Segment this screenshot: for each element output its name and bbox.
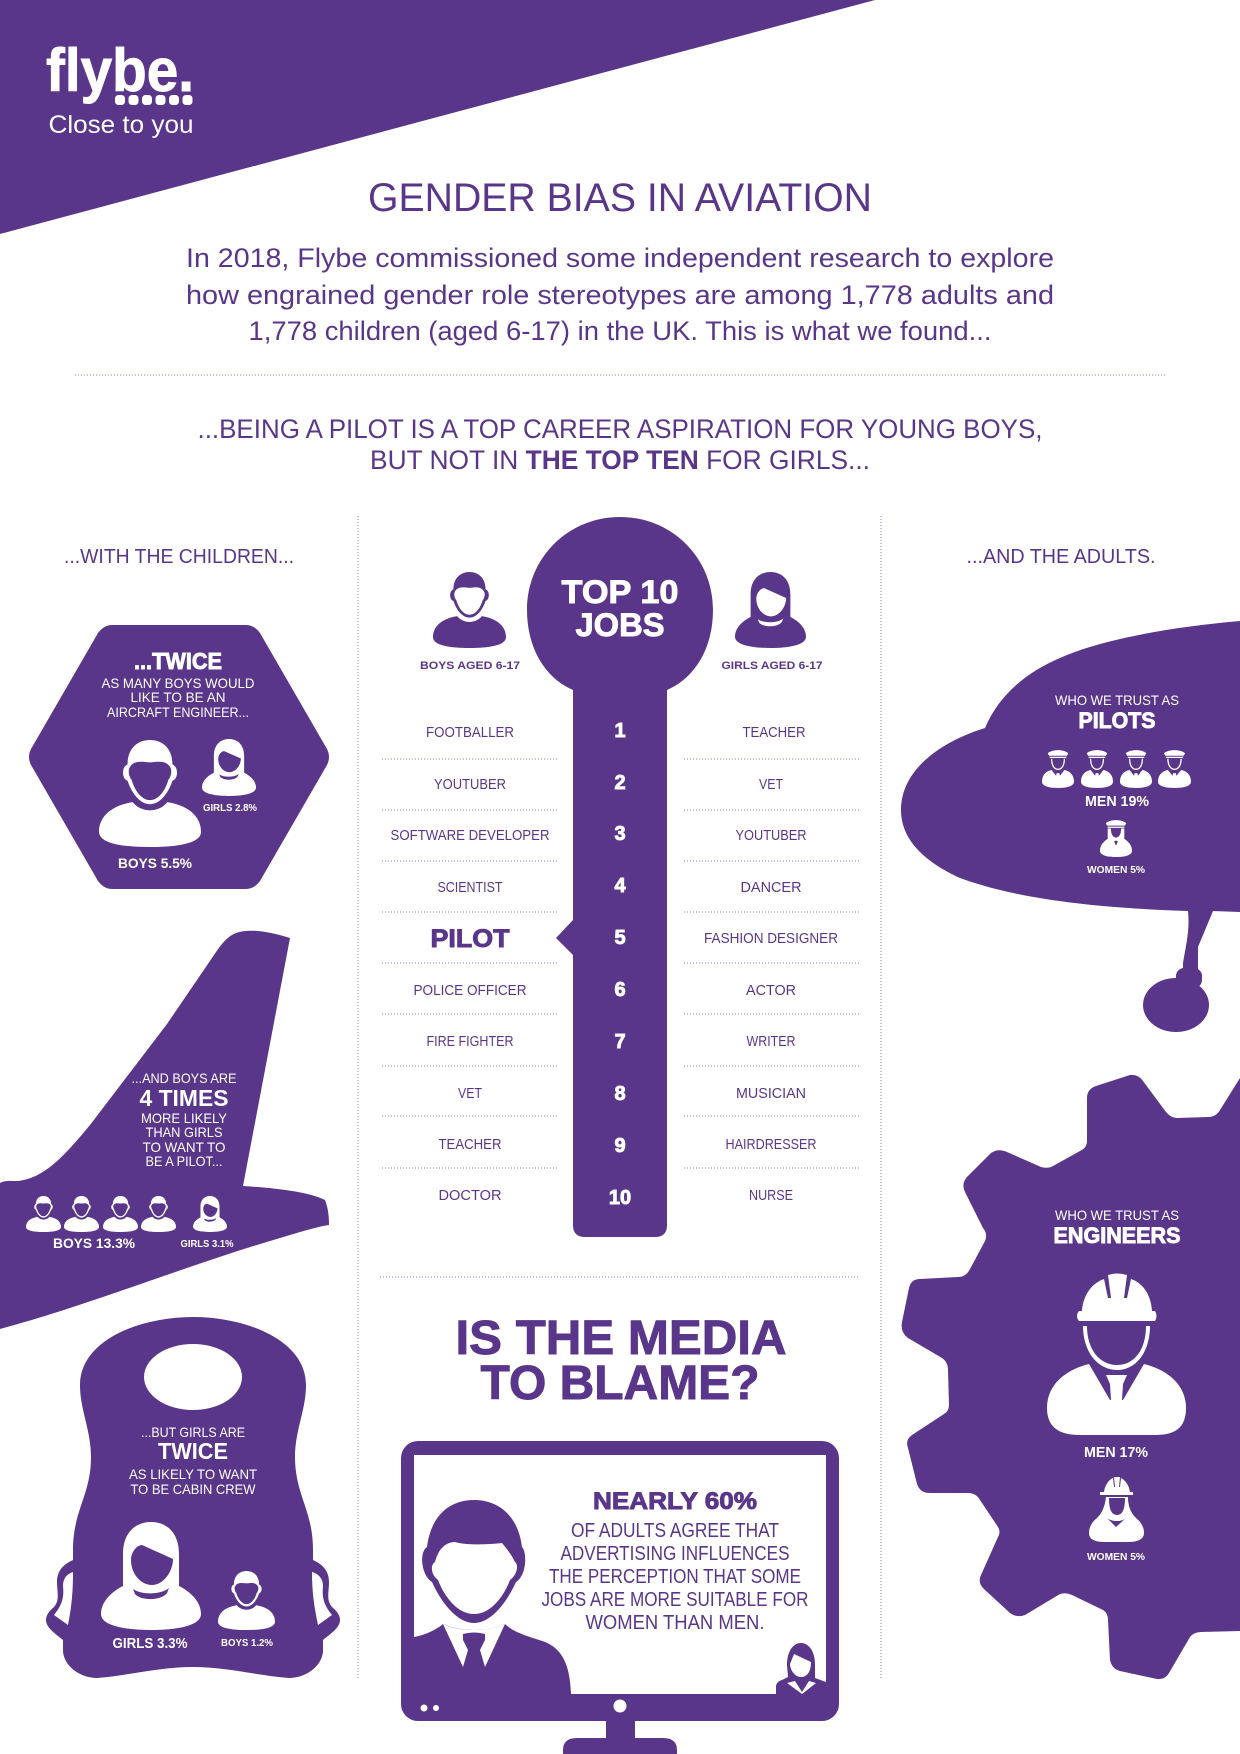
rank numbers: 3 — [614, 823, 626, 845]
icon: girls column — [735, 572, 806, 648]
logo wordmark: flybe. — [46, 37, 194, 104]
intro paragraph: In 2018, Flybe commissioned some independent research to explore — [186, 243, 1054, 273]
panel: aircraft tail — [0, 931, 329, 1329]
cabin crew text — [129, 1424, 257, 1497]
tail text: THAN GIRLS — [146, 1124, 222, 1140]
column heading: adults: ...AND THE ADULTS. — [966, 546, 1156, 568]
rank numbers: 10 — [609, 1187, 631, 1209]
girls column label: GIRLS AGED 6-17 — [722, 660, 822, 672]
tail text: TO WANT TO — [142, 1139, 226, 1155]
flybe logo — [46, 37, 194, 139]
tail text: BE A PILOT... — [146, 1153, 222, 1169]
tail text: 4 TIMES — [140, 1085, 228, 1111]
hexagon text: LIKE TO BE AN — [130, 689, 226, 705]
logo dots — [115, 95, 192, 105]
engineers heading: ENGINEERS — [1054, 1223, 1180, 1248]
pilots text: WHO WE TRUST AS — [1055, 692, 1179, 708]
boys job list: POLICE OFFICER — [414, 982, 527, 999]
icons: four male pilots — [1042, 750, 1191, 788]
boys job list: DOCTOR — [438, 1187, 502, 1204]
label: women 5: WOMEN 5% — [1087, 865, 1145, 876]
subheading: BUT NOT IN THE TOP TEN FOR GIRLS... — [370, 445, 870, 475]
icon: female presenter — [776, 1643, 826, 1694]
screen text: ADVERTISING INFLUENCES — [560, 1543, 790, 1565]
title: GENDER BIAS IN AVIATION — [368, 176, 872, 220]
cabin crew text: TWICE — [158, 1438, 228, 1464]
icon: female engineer — [1089, 1477, 1144, 1542]
screen headline: NEARLY 60% — [593, 1488, 757, 1515]
panel: TV monitor — [401, 1441, 839, 1754]
panel: top 10 jobs: JOBS — [576, 607, 664, 643]
hexagon text — [102, 675, 254, 720]
boys job list: SCIENTIST — [438, 879, 502, 896]
girls job list: MUSICIAN — [736, 1085, 806, 1102]
panel: cabin crew headrest — [46, 1317, 340, 1678]
intro paragraph: 1,778 children (aged 6-17) in the UK. This is what we found... — [248, 316, 992, 346]
rank numbers — [609, 720, 631, 1209]
background header triangle — [0, 0, 875, 234]
keyhole heading: TOP 10 — [562, 574, 678, 610]
engineers text: WHO WE TRUST AS — [1055, 1207, 1179, 1223]
screen text: OF ADULTS AGREE THAT — [571, 1520, 779, 1542]
intro paragraph: how engrained gender role stereotypes are among 1,778 adults and — [186, 280, 1054, 310]
rank numbers: 2 — [614, 772, 626, 794]
label: girls 2.8: GIRLS 2.8% — [203, 803, 257, 814]
icon: boy small — [218, 1571, 275, 1630]
icon: male engineer — [1047, 1274, 1186, 1435]
girls job list: YOUTUBER — [736, 827, 807, 844]
panel: gear engineers — [902, 1075, 1240, 1679]
girls job list: HAIRDRESSER — [726, 1136, 817, 1153]
rank numbers: 7 — [614, 1031, 626, 1053]
label: girls 3.1: GIRLS 3.1% — [180, 1239, 234, 1250]
cabin crew text: AS LIKELY TO WANT — [129, 1466, 257, 1482]
panel: hexagon aircraft engineer — [29, 625, 329, 889]
hexagon heading: ...TWICE — [134, 648, 222, 674]
keyhole shape — [527, 517, 713, 1237]
label: boys 1.2: BOYS 1.2% — [221, 1638, 273, 1649]
girls job list: ACTOR — [746, 982, 796, 999]
rank numbers: 6 — [614, 979, 626, 1001]
girls job list: TEACHER — [742, 724, 806, 741]
girls job list: VET — [759, 776, 783, 793]
rank numbers: 5 — [614, 927, 626, 949]
logo tagline: Close to you — [48, 111, 194, 139]
icon: female pilot — [1100, 820, 1132, 857]
media heading: IS THE MEDIA — [456, 1312, 786, 1365]
hexagon text: AS MANY BOYS WOULD — [102, 675, 254, 691]
subheading: ...BEING A PILOT IS A TOP CAREER ASPIRATION FOR YOUNG BOYS, — [198, 414, 1042, 444]
screen text: THE PERCEPTION THAT SOME — [549, 1566, 801, 1588]
rank numbers: 8 — [614, 1083, 626, 1105]
boys job list: YOUTUBER — [434, 776, 506, 793]
rank numbers: 9 — [614, 1135, 626, 1157]
icon: male presenter — [414, 1500, 571, 1694]
screen text: WOMEN THAN MEN. — [586, 1612, 764, 1634]
icon: girl — [193, 1196, 227, 1232]
girls job list: WRITER — [746, 1033, 796, 1050]
tail text — [132, 1070, 236, 1169]
pilots heading: PILOTS — [1078, 708, 1156, 733]
screen text — [542, 1520, 808, 1634]
girls job list — [704, 724, 838, 1204]
tail text: ...AND BOYS ARE — [132, 1070, 236, 1086]
screen text: JOBS ARE MORE SUITABLE FOR — [542, 1589, 808, 1611]
media heading — [456, 1312, 786, 1410]
girls job list: NURSE — [749, 1187, 793, 1204]
label: women 5: WOMEN 5% — [1087, 1552, 1145, 1563]
boys job list: PILOT — [430, 925, 510, 953]
boys job list: FOOTBALLER — [426, 724, 514, 741]
column heading: children: ...WITH THE CHILDREN... — [64, 546, 294, 568]
boys column label: BOYS AGED 6-17 — [420, 660, 520, 672]
cabin crew text: ...BUT GIRLS ARE — [141, 1424, 245, 1440]
boys job list: SOFTWARE DEVELOPER — [390, 827, 550, 844]
boys job list: TEACHER — [438, 1136, 502, 1153]
cabin crew text: TO BE CABIN CREW — [130, 1481, 256, 1497]
girls job list: FASHION DESIGNER — [704, 930, 838, 947]
icons: four boys — [26, 1196, 176, 1232]
subheading — [198, 414, 1042, 475]
icon: boy large — [99, 740, 201, 847]
label: girls 3.3: GIRLS 3.3% — [112, 1635, 188, 1652]
hexagon text: AIRCRAFT ENGINEER... — [107, 704, 249, 720]
media heading: TO BLAME? — [480, 1357, 760, 1410]
icon: girl large — [101, 1522, 201, 1630]
tail text: MORE LIKELY — [141, 1110, 228, 1126]
panel: top 10 jobs — [382, 517, 859, 1237]
intro paragraph — [186, 243, 1054, 346]
label: men 17: MEN 17% — [1084, 1444, 1148, 1461]
label: boys 13.3: BOYS 13.3% — [53, 1235, 136, 1251]
label: men 19: MEN 19% — [1085, 793, 1149, 810]
girls job list: DANCER — [740, 879, 802, 896]
label: boys 5.5: BOYS 5.5% — [118, 855, 193, 871]
boys job list: VET — [458, 1085, 482, 1102]
panel: aircraft nose pilots — [901, 621, 1240, 1032]
boys job list — [390, 724, 550, 1204]
rank numbers: 1 — [614, 720, 626, 742]
rank numbers: 4 — [614, 875, 626, 897]
icon: girl small — [202, 739, 256, 796]
icon: boys column — [433, 572, 506, 648]
boys job list: FIRE FIGHTER — [426, 1033, 514, 1050]
